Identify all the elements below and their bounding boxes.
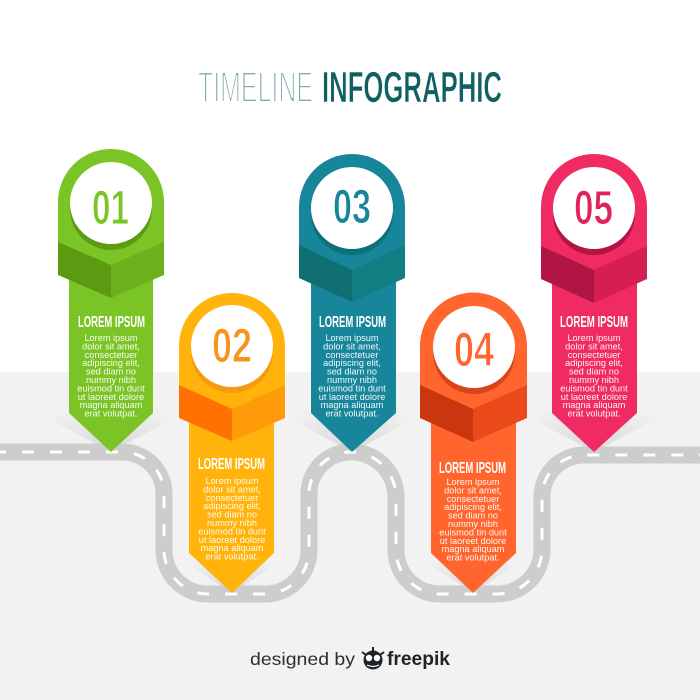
- text 01: sed diam no: [86, 367, 136, 377]
- text 01: ut laoreet dolore: [78, 392, 144, 402]
- text 03: euismod tin dunt: [318, 383, 386, 393]
- ground background: [0, 372, 700, 700]
- marker 05 band: [541, 246, 647, 303]
- text 03: dolor sit amet,: [323, 341, 381, 351]
- marker 02: [179, 293, 285, 593]
- text 04: ut laoreet dolore: [440, 536, 506, 546]
- marker 01 band: [58, 242, 164, 298]
- heading 05: LOREM IPSUM: [560, 314, 628, 331]
- number 01: 01: [92, 182, 129, 235]
- text 03: consectetuer: [326, 350, 378, 360]
- text 03: ut laoreet dolore: [319, 392, 385, 402]
- heading 01: LOREM IPSUM: [78, 314, 145, 331]
- text 01: nummy nibh: [86, 375, 136, 385]
- number 05: 05: [574, 182, 613, 235]
- marker 05: [541, 154, 647, 452]
- text 05: adipiscing elit,: [565, 358, 623, 368]
- text 01: consectetuer: [85, 350, 137, 360]
- title: [198, 63, 502, 112]
- marker 05 body: [541, 154, 647, 452]
- text 02: nummy nibh: [207, 518, 257, 528]
- marker 03 band: [299, 245, 405, 302]
- text 03: nummy nibh: [327, 375, 377, 385]
- freepik wordmark: freepik: [387, 649, 450, 670]
- marker 02 body: [179, 293, 285, 593]
- marker 05 badge: [553, 167, 635, 255]
- text 04: magna aliquam: [442, 544, 505, 554]
- marker 01 badge: [70, 162, 152, 250]
- marker 02 badge: [191, 305, 273, 393]
- text 05: dolor sit amet,: [565, 341, 623, 351]
- text 01: adipiscing elit,: [82, 358, 140, 368]
- marker 03 body: [299, 154, 405, 452]
- marker 03: [299, 154, 405, 452]
- text 03: adipiscing elit,: [323, 358, 381, 368]
- title: INFOGRAPHIC: [322, 63, 502, 112]
- text 03: Lorem ipsum: [325, 333, 379, 343]
- heading 02: LOREM IPSUM: [198, 456, 265, 473]
- text 04: consectetuer: [447, 494, 499, 504]
- text 01: dolor sit amet,: [82, 341, 140, 351]
- marker 04 band: [420, 385, 527, 442]
- text 05: erat volutpat.: [567, 409, 621, 419]
- footer credit: [250, 647, 450, 670]
- text 04: nummy nibh: [448, 519, 498, 529]
- marker 04: [420, 293, 527, 593]
- text 04: adipiscing elit,: [444, 502, 502, 512]
- text 03: sed diam no: [327, 367, 377, 377]
- text 02: adipiscing elit,: [203, 501, 261, 511]
- text 01: Lorem ipsum: [84, 333, 138, 343]
- number 02: 02: [212, 320, 252, 373]
- text 04: dolor sit amet,: [444, 485, 502, 495]
- road: [0, 452, 700, 594]
- text 01: euismod tin dunt: [77, 383, 145, 393]
- text 04: erat volutpat.: [446, 553, 500, 563]
- text 02: erat volutpat.: [205, 552, 259, 562]
- marker 04 badge: [433, 306, 515, 394]
- text 02: magna aliquam: [201, 543, 264, 553]
- text 04: euismod tin dunt: [439, 527, 507, 537]
- heading 04: LOREM IPSUM: [439, 460, 506, 477]
- text 02: sed diam no: [207, 510, 257, 520]
- text 02: ut laoreet dolore: [199, 535, 265, 545]
- number 04: 04: [454, 324, 494, 377]
- text 05: consectetuer: [568, 350, 620, 360]
- text 02: euismod tin dunt: [198, 526, 266, 536]
- marker 04 body: [420, 293, 527, 593]
- text 02: consectetuer: [206, 493, 258, 503]
- icon: freepik logo: [362, 647, 384, 670]
- text 01: erat volutpat.: [84, 409, 138, 419]
- marker 02 band: [179, 385, 285, 441]
- text 05: magna aliquam: [563, 400, 626, 410]
- marker 01: [58, 149, 164, 452]
- text 01: magna aliquam: [80, 400, 143, 410]
- text 05: sed diam no: [569, 367, 619, 377]
- text 04: sed diam no: [448, 511, 498, 521]
- designed by text: designed by: [250, 649, 355, 669]
- text 05: nummy nibh: [569, 375, 619, 385]
- text 02: dolor sit amet,: [203, 484, 261, 494]
- text 02: Lorem ipsum: [205, 476, 259, 486]
- number 03: 03: [333, 181, 371, 234]
- marker shadows: [36, 372, 669, 593]
- text 03: erat volutpat.: [325, 409, 379, 419]
- text 04: Lorem ipsum: [446, 477, 500, 487]
- marker 03 badge: [311, 167, 393, 255]
- text 05: ut laoreet dolore: [561, 392, 627, 402]
- marker 01 body: [58, 149, 164, 452]
- heading 03: LOREM IPSUM: [319, 314, 386, 331]
- text 05: Lorem ipsum: [567, 333, 621, 343]
- text 03: magna aliquam: [321, 400, 384, 410]
- title: TIMELINE: [198, 63, 313, 112]
- text 05: euismod tin dunt: [560, 383, 628, 393]
